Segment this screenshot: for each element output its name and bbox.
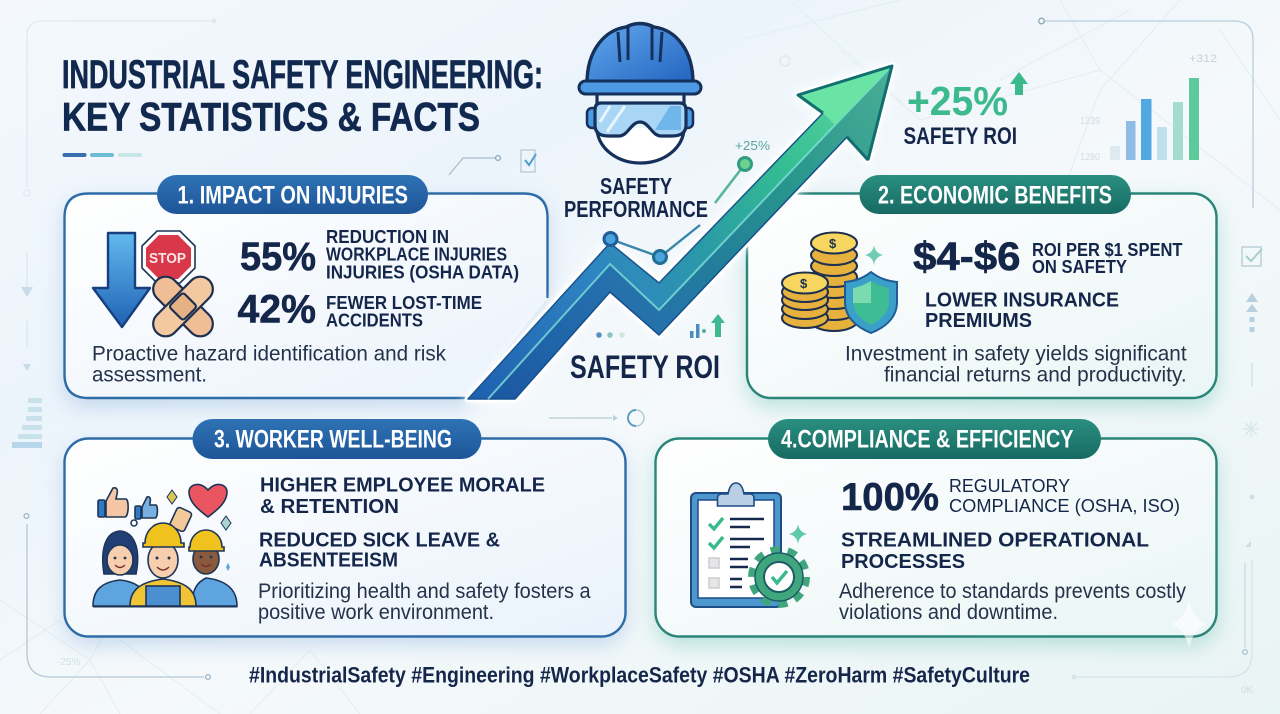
text: compliance description: Adherence to standards prevents costly <box>839 580 1186 603</box>
stat: 55 percent: REDUCTION IN <box>326 227 449 247</box>
stat: 55 percent: WORKPLACE INJURIES <box>326 244 507 264</box>
text: impact description: Proactive hazard identification and risk <box>92 343 446 366</box>
fact: higher morale: HIGHER EMPLOYEE MORALE <box>260 474 545 497</box>
fact: streamlined processes: STREAMLINED OPERATIONAL <box>841 529 1149 552</box>
fact: lower insurance premiums: PREMIUMS <box>925 310 1032 332</box>
fact: higher morale: & RETENTION <box>260 495 399 518</box>
fact: reduced sick leave: ABSENTEEISM <box>259 549 398 572</box>
heading pill: impact on injuries: 1. IMPACT ON INJURIES <box>178 182 408 210</box>
stat: 42 percent: ACCIDENTS <box>326 311 423 331</box>
stat: 42 percent: FEWER LOST-TIME <box>326 293 482 313</box>
icon: safety worker with hard hat and goggles <box>579 24 701 163</box>
stat: 4 to 6 dollars ROI: ROI PER $1 SPENT <box>1032 240 1182 260</box>
text: compliance description <box>839 580 1186 624</box>
stat: 42 percent <box>238 288 482 332</box>
title <box>62 53 543 140</box>
trend line with nodes <box>604 138 770 264</box>
icon: down arrow <box>93 233 150 327</box>
text: economic description: Investment in safety yields significant <box>845 343 1187 366</box>
icon: stop sign <box>142 231 195 283</box>
text: impact description: assessment. <box>92 364 207 387</box>
panel: impact on injuries <box>64 175 548 398</box>
label: safety ROI center: SAFETY ROI <box>570 349 720 385</box>
label: safety performance: PERFORMANCE <box>564 196 708 222</box>
bar chart <box>1110 78 1199 160</box>
heading pill: compliance and efficiency <box>768 419 1101 459</box>
title: KEY STATISTICS & FACTS <box>62 96 480 140</box>
panel: compliance and efficiency <box>656 419 1216 648</box>
text: well-being description: Prioritizing health and safety fosters a <box>258 580 591 603</box>
heading pill: economic benefits <box>860 175 1131 214</box>
stat: 100 percent compliance <box>841 476 1180 519</box>
icon: clipboard with gear <box>691 483 807 607</box>
infographic canvas: 1239 <box>1080 116 1100 127</box>
text: impact description <box>92 343 446 387</box>
fact: reduced sick leave: REDUCED SICK LEAVE & <box>259 529 500 552</box>
stat: 4 to 6 dollars ROI: $4-$6 <box>913 235 1020 279</box>
heading pill: compliance and efficiency: 4.COMPLIANCE & EFFICIENCY <box>781 426 1074 454</box>
title: INDUSTRIAL SAFETY ENGINEERING: <box>62 53 543 97</box>
fact: lower insurance premiums <box>925 290 1119 332</box>
icon: coin stacks and shield: $ <box>800 276 808 291</box>
heading pill: economic benefits: 2. ECONOMIC BENEFITS <box>878 182 1112 210</box>
stat: 4 to 6 dollars ROI <box>913 235 1182 279</box>
infographic canvas: 0K <box>1241 685 1254 696</box>
stat: 42 percent: 42% <box>238 288 316 332</box>
fact: lower insurance premiums: LOWER INSURANCE <box>925 290 1119 312</box>
icon: sparkle <box>865 245 883 265</box>
panel: economic benefits <box>747 175 1216 398</box>
fact: streamlined processes <box>841 529 1149 573</box>
label: safety performance: SAFETY <box>600 173 672 199</box>
fact: streamlined processes: PROCESSES <box>841 550 965 573</box>
icon: stop sign: STOP <box>149 250 186 267</box>
text: economic description <box>845 343 1187 387</box>
fact: higher morale <box>260 474 545 518</box>
heading pill: impact on injuries <box>157 175 428 214</box>
callout: plus 25 percent safety ROI: +25% <box>907 78 1008 124</box>
stat: 100 percent compliance: COMPLIANCE (OSHA, ISO) <box>949 496 1180 516</box>
heading pill: worker well-being: 3. WORKER WELL-BEING <box>214 426 452 454</box>
stat: 4 to 6 dollars ROI: ON SAFETY <box>1032 257 1127 277</box>
icon: coin stacks and shield: $ <box>829 236 837 251</box>
icon: crossed bandages <box>148 271 218 342</box>
infographic canvas: -25% <box>57 657 80 668</box>
mini dots and growth icon <box>596 314 725 338</box>
text: economic description: financial returns and productivity. <box>884 364 1187 387</box>
stat: 55 percent: 55% <box>240 235 316 279</box>
stat: 100 percent compliance: REGULATORY <box>949 476 1070 496</box>
text: well-being description: positive work environment. <box>258 601 494 624</box>
callout: plus 25 percent safety ROI: SAFETY ROI <box>904 123 1017 150</box>
hashtags: #IndustrialSafety #Engineering #WorkplaceSafety #OSHA #ZeroHarm #SafetyCulture <box>249 663 1030 688</box>
stat: 55 percent: INJURIES (OSHA DATA) <box>326 262 519 282</box>
stat: 55 percent <box>240 227 519 282</box>
icon: coin stacks and shield <box>782 232 897 333</box>
stat: 100 percent compliance: 100% <box>841 476 939 519</box>
panel: worker well-being <box>64 419 626 636</box>
text: compliance description: violations and downtime. <box>839 601 1058 624</box>
heading pill: worker well-being <box>192 419 482 459</box>
label: safety performance <box>564 173 708 222</box>
big rising arrow <box>468 66 892 399</box>
infographic canvas: 1280 <box>1080 152 1100 163</box>
title accent dashes <box>62 153 142 157</box>
text: well-being description <box>258 580 591 624</box>
icon: workers with thumbs up and heart <box>93 484 238 606</box>
fact: reduced sick leave <box>259 529 500 572</box>
callout: plus 25 percent safety ROI <box>904 72 1028 150</box>
trend line with nodes: +25% <box>735 138 770 153</box>
infographic canvas: +312 <box>1189 53 1217 65</box>
